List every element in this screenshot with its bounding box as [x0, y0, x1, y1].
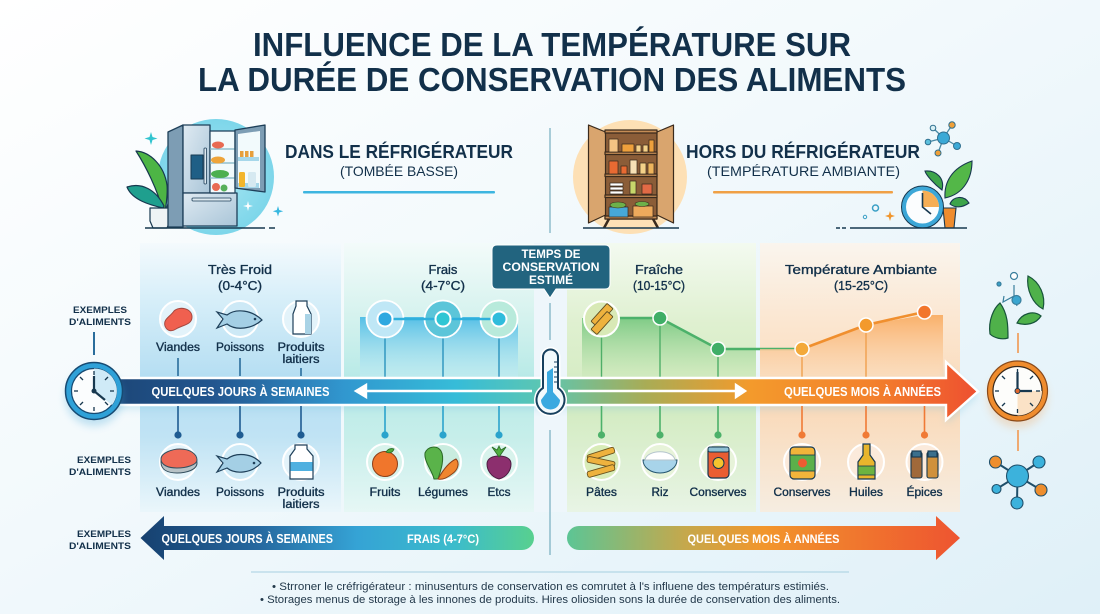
bottom row labels: Riz — [652, 487, 669, 499]
label: exemples d'aliments middle: EXEMPLES — [77, 455, 131, 466]
top row labels: Viandes — [156, 342, 200, 354]
bottom row labels: Huiles — [849, 487, 883, 499]
label: exemples d'aliments middle: D'ALIMENTS — [69, 467, 131, 478]
main arrow band — [110, 362, 978, 424]
bottom row labels: Viandes — [156, 487, 200, 499]
band inner arrow left — [356, 385, 532, 397]
icon: beetroot — [481, 444, 517, 480]
label: exemples d'aliments top: D'ALIMENTS — [69, 317, 131, 328]
panel heading: fraîche — [633, 262, 685, 293]
bottom arrow right: QUELQUES MOIS À ANNÉES — [688, 531, 840, 546]
band inner arrow right — [568, 385, 745, 397]
chart: température ambiante area and line — [760, 305, 943, 377]
title: INFLUENCE DE LA TEMPÉRATURE SUR — [253, 26, 851, 63]
band label right: QUELQUES MOIS À ANNÉES — [784, 384, 941, 399]
panel heading: fraîche: Fraîche — [635, 262, 683, 277]
bottom row labels: laitiers — [282, 499, 320, 511]
icon: red can — [700, 444, 736, 480]
panel: très froid — [140, 243, 341, 512]
panel: fraîche — [567, 243, 756, 512]
footer notes: • Storages menus de storage à les innones de produits. Hires oliosiden sons la durée de conservation des aliments. — [260, 594, 840, 606]
icon: steak — [160, 444, 197, 480]
icon: left clock — [65, 362, 123, 426]
bottom row labels: Etcs — [488, 487, 511, 499]
centre divider — [549, 128, 551, 555]
bottom row labels: Fruits — [370, 487, 401, 499]
bottom row labels: Pâtes — [586, 487, 617, 499]
bottom row labels: Épices — [906, 486, 943, 499]
icon: tomato can — [784, 444, 820, 480]
icon: leaves and molecule right — [990, 272, 1044, 339]
icon: fish — [217, 444, 261, 480]
panel heading: température ambiante: Température Ambiante — [785, 262, 937, 277]
callout: temps de conservation estimé: TEMPS DE — [522, 249, 581, 261]
icon: clock with plant — [836, 161, 972, 228]
connector right bottom — [1017, 430, 1019, 451]
label: exemples d'aliments bottom: EXEMPLES — [77, 529, 131, 540]
label: exemples d'aliments top: EXEMPLES — [73, 305, 127, 316]
heading: dans le réfrigérateur: (TOMBÉE BASSE) — [340, 163, 458, 179]
heading: dans le réfrigérateur: DANS LE RÉFRIGÉRATEUR — [285, 141, 513, 162]
bottom row labels: Conserves — [690, 487, 747, 499]
panel heading: très froid — [208, 262, 272, 293]
panel heading: température ambiante — [785, 262, 937, 293]
icon: milk carton — [283, 301, 319, 337]
icon: thermometer — [537, 350, 564, 414]
callout: temps de conservation estimé: CONSERVATION — [502, 262, 600, 274]
heading: hors du réfrigérateur — [686, 141, 920, 179]
icon: refrigerator — [127, 119, 283, 235]
panel heading: fraîche: (10-15°C) — [633, 278, 685, 293]
connector left clock — [93, 332, 95, 355]
label: exemples d'aliments top — [69, 305, 131, 328]
panel heading: très froid: (0-4°C) — [218, 278, 262, 293]
connectors below and above band — [175, 358, 927, 438]
heading: hors du réfrigérateur: HORS DU RÉFRIGÉRATEUR — [686, 141, 920, 162]
heading: dans le réfrigérateur — [285, 141, 513, 179]
chart: frais area and line — [360, 300, 518, 377]
bottom arrow right — [567, 516, 960, 560]
panel heading: frais: (4-7°C) — [421, 278, 465, 293]
icon: meat — [160, 301, 196, 337]
bottom row labels: Poissons — [216, 487, 264, 499]
icon: fish — [217, 301, 262, 337]
icon: molecule top right — [925, 122, 960, 156]
panel heading: frais — [421, 262, 465, 293]
band label left: QUELQUES JOURS À SEMAINES — [152, 384, 330, 399]
footer divider — [251, 571, 849, 573]
bottom row labels: Produits — [278, 487, 325, 499]
icon: spice jars — [906, 444, 942, 480]
footer notes: • Strroner le créfrigérateur : minusenturs de conservation es comrutet à l's influene des températurs estimiés. — [272, 581, 829, 593]
label: exemples d'aliments middle — [69, 455, 131, 478]
panel heading: frais: Frais — [429, 262, 458, 277]
panel: température ambiante — [760, 243, 960, 512]
heading underline blue — [303, 191, 495, 194]
top row labels: laitiers — [282, 354, 320, 366]
icon: pantry cabinet — [573, 120, 687, 234]
icon: milk carton — [283, 444, 319, 480]
bottom row labels: Conserves — [774, 487, 831, 499]
icon: apple — [367, 444, 403, 480]
panel: centre strip — [534, 243, 567, 512]
footer notes — [260, 581, 840, 606]
title — [198, 26, 906, 98]
icon: pasta — [584, 444, 620, 480]
icon: rice bowl — [642, 444, 678, 480]
heading underline orange — [713, 191, 893, 194]
label: exemples d'aliments bottom: D'ALIMENTS — [69, 541, 131, 552]
icon: oil bottle — [848, 444, 884, 480]
callout: temps de conservation estimé: ESTIMÉ — [529, 274, 573, 287]
connector right top — [1017, 333, 1019, 353]
panel heading: température ambiante: (15-25°C) — [834, 278, 888, 293]
bottom arrow left — [140, 516, 534, 560]
heading: hors du réfrigérateur: (TEMPÉRATURE AMBIANTE) — [707, 163, 900, 179]
icon: vegetables — [425, 444, 461, 480]
top row labels: Produits — [278, 342, 325, 354]
bottom arrow left: QUELQUES JOURS À SEMAINES — [162, 531, 333, 546]
bottom row labels: Légumes — [418, 487, 468, 499]
panel heading: très froid: Très Froid — [208, 262, 272, 277]
callout: temps de conservation estimé — [492, 245, 610, 298]
label: exemples d'aliments bottom — [69, 529, 131, 552]
icon: right clock — [988, 361, 1048, 428]
icon: molecule network — [990, 456, 1047, 509]
bottom row labels — [156, 486, 943, 511]
title: LA DURÉE DE CONSERVATION DES ALIMENTS — [198, 61, 906, 98]
top row labels: Poissons — [216, 342, 264, 354]
bottom arrow left: FRAIS (4-7°C) — [407, 532, 479, 546]
top row labels — [156, 342, 325, 366]
chart: fraîche area and line — [582, 302, 802, 377]
panel: frais — [344, 243, 534, 512]
icon: plant — [127, 151, 172, 228]
